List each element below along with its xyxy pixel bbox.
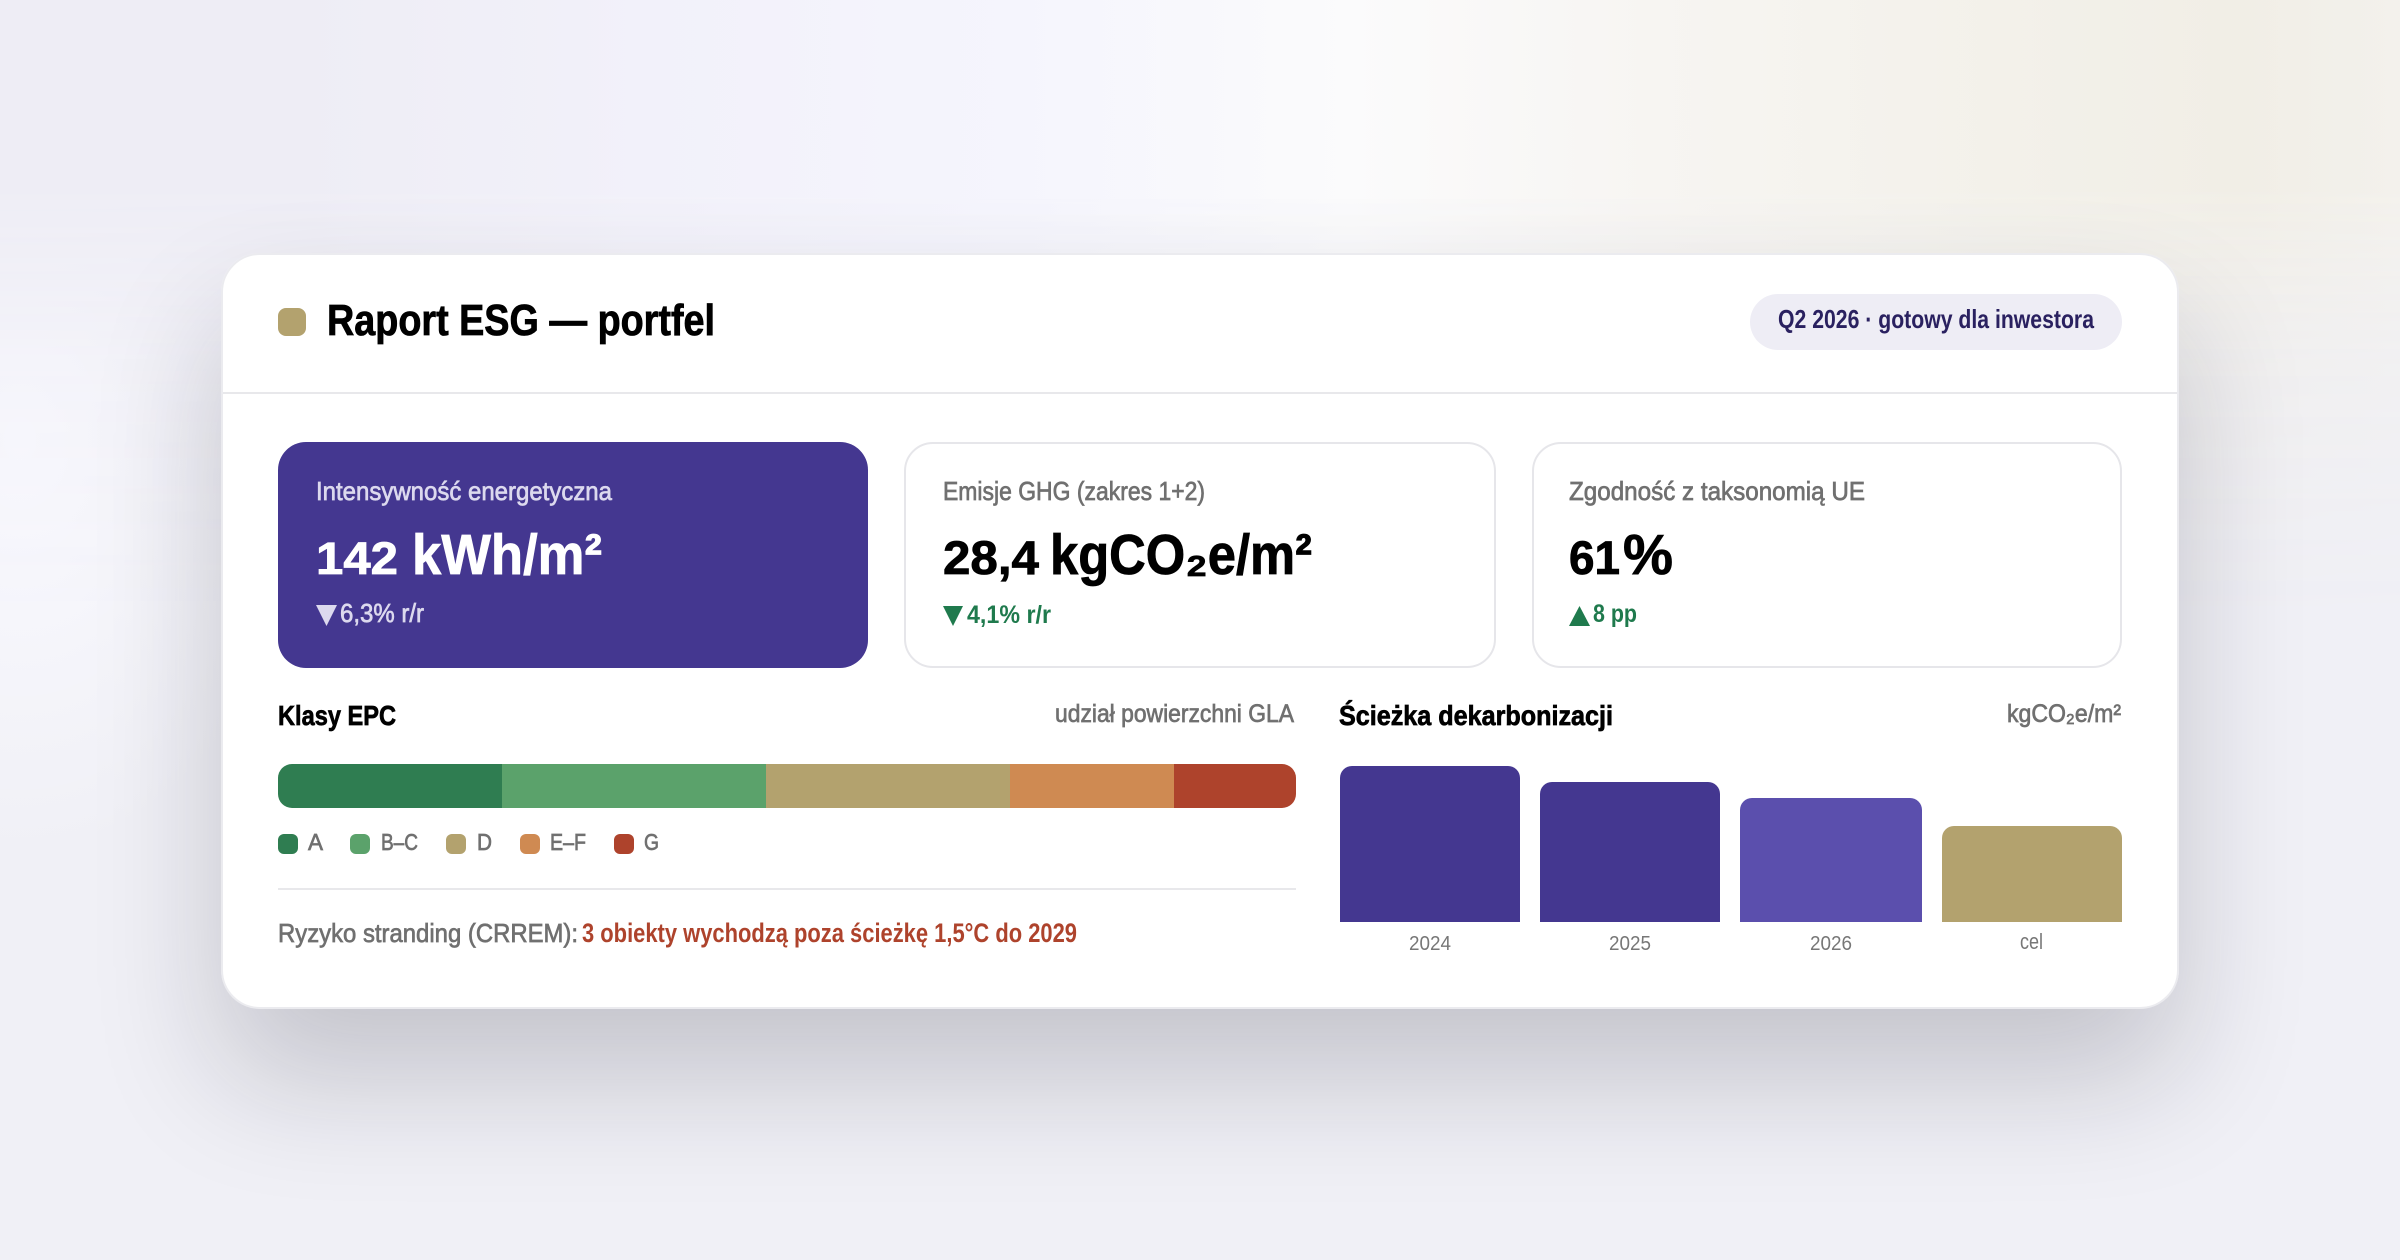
delta — [1569, 600, 1637, 628]
panel: energy intensity — [278, 442, 868, 668]
note: udział powierzchni GLA — [1055, 700, 1294, 728]
EPC section — [278, 700, 1296, 948]
status pill — [1750, 294, 2122, 350]
value: kgCO₂e/m² — [1050, 523, 1312, 587]
value — [943, 523, 1312, 587]
stranding risk note: Ryzyko stranding (CRREM): — [278, 918, 578, 948]
label: Emisje GHG (zakres 1+2) — [943, 476, 1205, 506]
value: % — [1623, 523, 1673, 587]
heading: Ścieżka dekarbonizacji — [1339, 700, 1613, 731]
legend: E–F — [550, 829, 586, 855]
delta: 4,1% r/r — [967, 601, 1051, 629]
stranding risk note: 3 obiekty wychodzą poza ścieżkę 1,5°C do 2029 — [582, 918, 1077, 948]
bar chart: 2025 — [1609, 933, 1651, 955]
value — [1569, 523, 1673, 587]
header: title — [278, 296, 715, 345]
status pill: Q2 2026 · gotowy dla inwestora — [1778, 304, 2094, 334]
panel: EU taxonomy — [1533, 443, 2121, 667]
bar chart: cel — [2020, 929, 2043, 954]
background top wash — [1186, 0, 2400, 320]
card shadow — [221, 253, 2179, 1008]
delta: 8 pp — [1593, 600, 1637, 628]
legend: B–C — [381, 829, 418, 855]
legend: A — [308, 829, 324, 855]
stacked bar — [278, 764, 1296, 808]
heading: Klasy EPC — [278, 700, 396, 731]
bar chart: 2026 — [1810, 933, 1852, 955]
bar chart: 2024 — [1409, 933, 1451, 955]
delta: 6,3% r/r — [340, 598, 424, 628]
panel: GHG emissions — [905, 443, 1495, 667]
decarbonisation section — [1339, 700, 2122, 955]
value: 61 — [1569, 531, 1620, 584]
label: Intensywność energetyczna — [316, 476, 612, 506]
unit: kgCO₂e/m² — [2007, 700, 2121, 728]
stranding risk note — [278, 918, 1077, 948]
legend: G — [644, 829, 659, 855]
title text: Raport ESG — portfel — [327, 296, 715, 345]
value: kWh/m² — [412, 523, 602, 587]
label: Zgodność z taksonomią UE — [1569, 476, 1865, 506]
value: 142 — [316, 533, 398, 584]
value: 28,4 — [943, 531, 1039, 584]
legend — [278, 829, 659, 855]
value — [316, 523, 602, 587]
bar chart — [1340, 766, 2122, 955]
icon: gold square — [278, 308, 306, 336]
legend: D — [477, 829, 492, 855]
